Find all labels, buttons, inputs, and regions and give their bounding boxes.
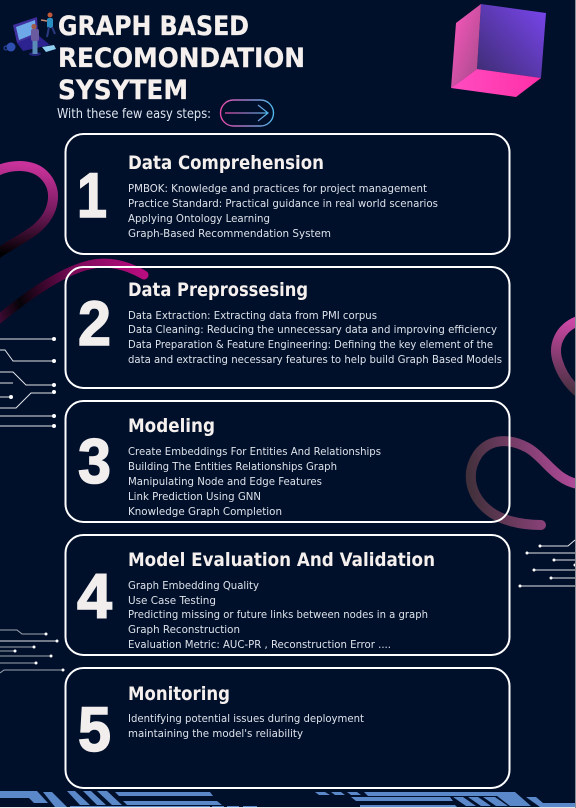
panel: step 4 model evaluation and validation: Model Evaluation And Validation	[128, 549, 435, 571]
panel: step 3 modeling: 3	[78, 427, 111, 497]
bottom circuit band	[0, 791, 576, 808]
circuit lines: left lower	[0, 630, 64, 673]
icon: 3D cube	[451, 4, 546, 97]
subtitle: With these few easy steps:	[57, 106, 211, 122]
title	[58, 11, 305, 106]
title: RECOMONDATION	[58, 43, 305, 74]
panel: step 5 monitoring: 5	[78, 695, 111, 765]
panel: step 4 model evaluation and validation: Graph Embedding Quality	[128, 579, 259, 592]
panel: step 1 data comprehension: 1	[77, 161, 107, 231]
circuit lines: left middle	[0, 337, 56, 428]
panel: step 4 model evaluation and validation: Predicting missing or future links between nodes in a graph	[128, 608, 428, 621]
panel: step 3 modeling: Modeling	[128, 415, 215, 437]
panel: step 2 data preprocessing: Data Preparation & Feature Engineering: Defining the key element of the	[128, 338, 493, 351]
panel: step 1 data comprehension: Practice Standard: Practical guidance in real world scenarios	[128, 197, 438, 210]
panel: step 4 model evaluation and validation: 4	[77, 562, 112, 632]
panel: step 4 model evaluation and validation: Use Case Testing	[128, 594, 216, 607]
title: GRAPH BASED	[58, 11, 249, 42]
panel: step 3 modeling	[66, 401, 510, 522]
panel: step 4 model evaluation and validation: Evaluation Metric: AUC-PR , Reconstruction Error ....	[128, 638, 391, 651]
panel: step 1 data comprehension: Graph-Based Recommendation System	[128, 227, 331, 240]
panel: step 2 data preprocessing: data and extracting necessary features to help build Graph Based Models	[128, 353, 502, 366]
panel: step 3 modeling: Link Prediction Using GNN	[128, 490, 261, 503]
panel: step 1 data comprehension	[66, 134, 510, 254]
icon: arrow pill	[220, 100, 274, 126]
panel: step 3 modeling: Knowledge Graph Completion	[128, 505, 282, 518]
panel: step 3 modeling: Create Embeddings For Entities And Relationships	[128, 445, 381, 458]
panel: step 2 data preprocessing: Data Preprossesing	[128, 279, 308, 301]
panel: step 5 monitoring	[66, 668, 510, 788]
panel: step 5 monitoring: Monitoring	[128, 683, 230, 705]
panel: step 1 data comprehension: PMBOK: Knowledge and practices for project management	[128, 182, 428, 195]
title: SYSYTEM	[58, 75, 188, 106]
panel: step 5 monitoring: maintaining the model's reliability	[128, 727, 303, 740]
panel: step 4 model evaluation and validation: Graph Reconstruction	[128, 623, 240, 636]
panel: step 2 data preprocessing: Data Cleaning: Reducing the unnecessary data and improving efficiency	[128, 323, 497, 336]
panel: step 2 data preprocessing	[66, 267, 510, 388]
panel: step 2 data preprocessing: Data Extraction: Extracting data from PMI corpus	[128, 309, 377, 322]
panel: step 1 data comprehension: Data Comprehension	[128, 152, 324, 174]
panel: step 1 data comprehension: Applying Ontology Learning	[128, 212, 270, 225]
circuit lines: right	[518, 540, 576, 588]
decorative curve: right pink loop	[556, 321, 576, 392]
decorative curve: right lower swirl	[471, 441, 576, 525]
decorative curve: left pink swoosh	[0, 263, 144, 322]
decorative curve: upper left pink loop	[0, 166, 53, 255]
panel: step 4 model evaluation and validation	[66, 535, 510, 655]
icon: laptop and people illustration	[4, 12, 56, 56]
panel: step 3 modeling: Manipulating Node and Edge Features	[128, 475, 322, 488]
panel: step 3 modeling: Building The Entities Relationships Graph	[128, 460, 337, 473]
panel: step 2 data preprocessing: 2	[78, 289, 111, 359]
panel: step 5 monitoring: Identifying potential issues during deployment	[128, 712, 365, 725]
